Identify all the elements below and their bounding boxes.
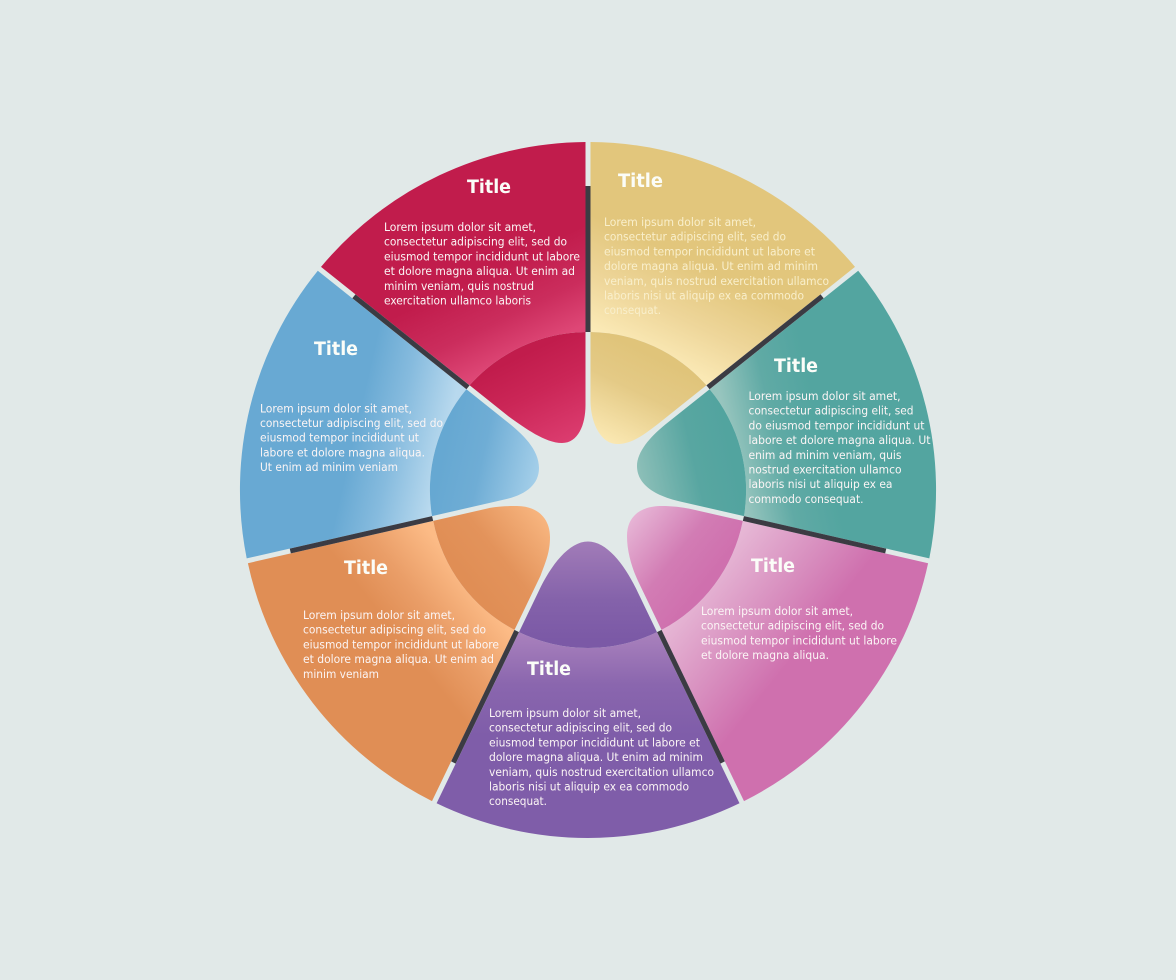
orange title: Title — [344, 558, 388, 579]
yellow body text — [604, 215, 829, 317]
orange body text — [303, 608, 499, 681]
purple body text: eiusmod tempor incididunt ut labore et — [489, 735, 700, 749]
orange body text: eiusmod tempor incididunt ut labore — [303, 637, 499, 651]
pink inner petal — [627, 506, 743, 630]
panel: yellow segment — [590, 142, 855, 444]
teal title: Title — [774, 356, 818, 377]
purple body text: laboris nisi ut aliquip ex ea commodo — [489, 780, 689, 794]
dark divider lines — [290, 186, 886, 762]
blue body text — [260, 401, 443, 474]
teal body text: laboris nisi ut aliquip ex ea — [748, 477, 892, 491]
pink outer sector — [662, 521, 928, 801]
blue inner petal — [430, 389, 539, 516]
pink body text: et dolore magna aliqua. — [701, 648, 829, 662]
yellow body text: consectetur adipiscing elit, sed do — [604, 230, 786, 244]
orange body text: Lorem ipsum dolor sit amet, — [303, 608, 455, 622]
red body text — [384, 220, 580, 308]
panel: purple segment — [437, 542, 740, 838]
purple body text: consequat. — [489, 794, 547, 808]
red body text: et dolore magna aliqua. Ut enim ad — [384, 264, 575, 278]
teal body text: Lorem ipsum dolor sit amet, — [748, 389, 900, 403]
purple outer sector — [437, 632, 740, 838]
orange outer sector — [248, 521, 514, 801]
teal inner petal — [637, 389, 746, 516]
orange inner petal — [433, 506, 550, 630]
red body text: exercitation ullamco laboris — [384, 294, 531, 308]
orange body text: minim veniam — [303, 667, 379, 681]
purple body text — [489, 706, 714, 808]
purple body text: veniam, quis nostrud exercitation ullamco — [489, 765, 714, 779]
teal body text: commodo consequat. — [748, 492, 864, 506]
red body text: Lorem ipsum dolor sit amet, — [384, 220, 536, 234]
purple inner petal — [519, 542, 657, 648]
orange body text: et dolore magna aliqua. Ut enim ad — [303, 652, 494, 666]
teal body text: enim ad minim veniam, quis — [748, 448, 902, 462]
pink body text: eiusmod tempor incididunt ut labore — [701, 633, 897, 647]
orange body text: consectetur adipiscing elit, sed do — [303, 623, 486, 637]
teal body text: nostrud exercitation ullamco — [748, 463, 902, 477]
pink body text: consectetur adipiscing elit, sed do — [701, 619, 884, 633]
red title: Title — [467, 177, 511, 198]
red body text: eiusmod tempor incididunt ut labore — [384, 249, 580, 263]
pink title: Title — [751, 556, 795, 577]
yellow outer sector — [590, 142, 855, 385]
pink body text — [701, 604, 897, 662]
yellow body text: laboris nisi ut aliquip ex ea commodo — [604, 289, 804, 303]
yellow body text: veniam, quis nostrud exercitation ullamco — [604, 274, 829, 288]
panel: orange segment — [248, 506, 550, 801]
yellow body text: dolore magna aliqua. Ut enim ad minim — [604, 259, 818, 273]
teal outer sector — [710, 271, 936, 558]
panel: blue segment — [240, 271, 539, 558]
blue body text: eiusmod tempor incididunt ut — [260, 431, 419, 445]
teal body text — [748, 389, 930, 506]
red body text: consectetur adipiscing elit, sed do — [384, 235, 567, 249]
teal body text: do eiusmod tempor incididunt ut — [748, 418, 924, 432]
red outer sector — [321, 142, 586, 385]
red body text: minim veniam, quis nostrud — [384, 279, 534, 293]
blue body text: Ut enim ad minim veniam — [260, 460, 398, 474]
panel: teal segment — [637, 271, 936, 558]
red inner petal — [470, 332, 586, 443]
panel: pink segment — [627, 506, 928, 801]
blue body text: Lorem ipsum dolor sit amet, — [260, 401, 412, 415]
yellow title: Title — [618, 171, 663, 192]
blue body text: consectetur adipiscing elit, sed do — [260, 416, 443, 430]
teal body text: labore et dolore magna aliqua. Ut — [748, 433, 930, 447]
teal body text: consectetur adipiscing elit, sed — [748, 404, 914, 418]
pink body text: Lorem ipsum dolor sit amet, — [701, 604, 853, 618]
blue title: Title — [314, 339, 358, 360]
yellow body text: consequat. — [604, 303, 661, 317]
panel: red segment — [321, 142, 586, 443]
yellow body text: eiusmod tempor incididunt ut labore et — [604, 244, 815, 258]
purple title: Title — [527, 659, 571, 680]
blue outer sector — [240, 271, 466, 558]
yellow inner petal — [590, 332, 706, 444]
purple body text: consectetur adipiscing elit, sed do — [489, 721, 672, 735]
purple body text: dolore magna aliqua. Ut enim ad minim — [489, 750, 703, 764]
blue body text: labore et dolore magna aliqua. — [260, 445, 425, 459]
purple body text: Lorem ipsum dolor sit amet, — [489, 706, 641, 720]
yellow body text: Lorem ipsum dolor sit amet, — [604, 215, 756, 229]
